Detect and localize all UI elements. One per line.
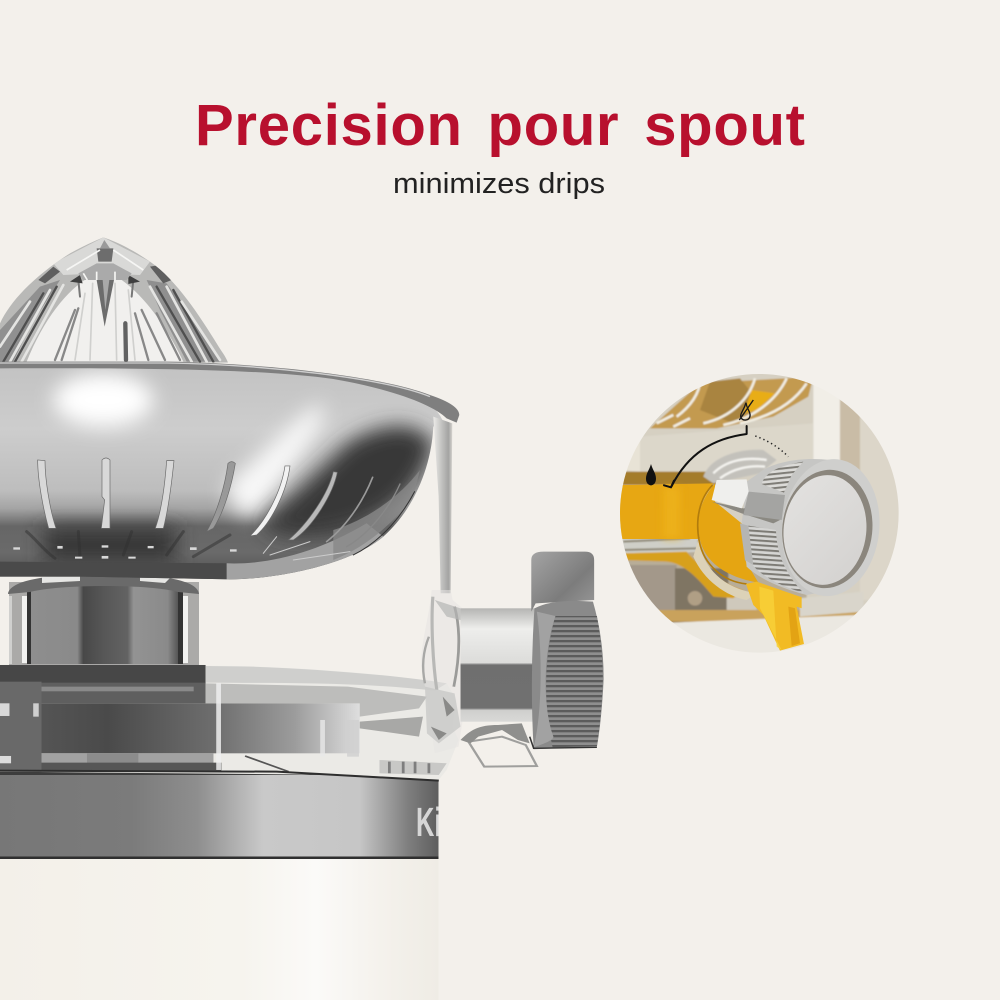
metal band with logo	[0, 772, 450, 859]
knurled strip lower	[748, 526, 803, 593]
arrow: curved from no drip to drop	[664, 426, 747, 487]
juicer appliance	[0, 230, 604, 1000]
amber basket with slats	[650, 377, 813, 428]
icon: no drip drop with slash	[739, 400, 753, 420]
juice stream	[746, 582, 804, 651]
juice container tray	[0, 665, 459, 781]
icon: water drop	[646, 464, 656, 485]
central column	[8, 574, 199, 665]
bowl rim	[0, 362, 459, 423]
drip lip	[461, 723, 537, 767]
juice-filled tube	[620, 483, 758, 600]
bowl	[0, 363, 467, 583]
glass reamer cone	[0, 230, 233, 363]
juicer body base	[0, 858, 438, 1000]
metal band with logo: Kit	[416, 800, 450, 846]
metal knob body	[712, 459, 828, 595]
subtitle: minimizes drips	[393, 168, 605, 200]
knob tab	[531, 552, 594, 612]
glass wall highlight	[433, 417, 452, 593]
dotted arc	[755, 436, 788, 457]
lower area	[628, 540, 807, 611]
glass collar	[703, 450, 777, 483]
strainer slots	[38, 458, 337, 540]
knurled strip upper	[762, 462, 803, 493]
strainer holes	[13, 545, 237, 559]
inset circle close-up of spout	[620, 374, 899, 652]
stainless steel bowl and reamer	[0, 230, 467, 593]
knob face	[782, 459, 880, 596]
knob	[532, 601, 604, 749]
brown strip behind tube	[620, 472, 717, 485]
spout tube	[421, 552, 604, 767]
inset background	[620, 374, 899, 652]
title: Precision pour spout	[195, 93, 805, 158]
